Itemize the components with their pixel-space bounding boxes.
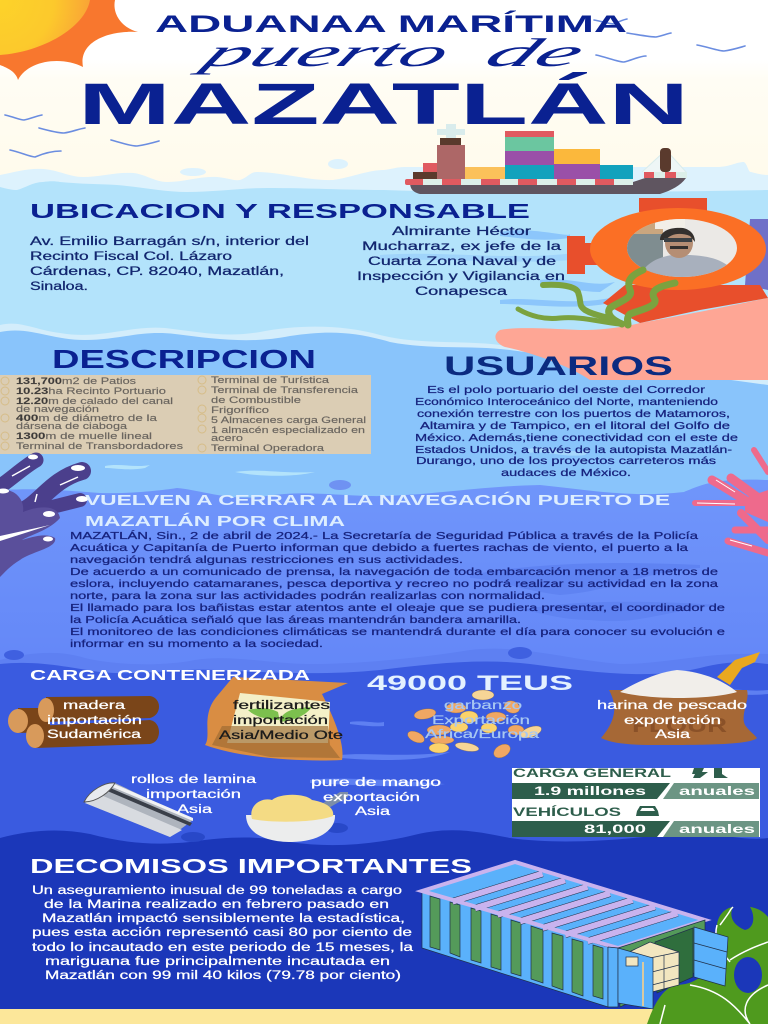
text: news body: norte, para la zona sur las actividades podrán realizarlas con normalidad. [70,590,545,602]
icon: chickpeas with garbanzo label: Africa/Europa [425,729,540,741]
text: responsable: Almirante Héctor [392,226,531,238]
panel: descripcion list: 5 Almacenes carga General [211,415,366,425]
panel: descripcion list: de navegación [16,404,99,414]
title: MAZATLÁN [78,72,689,137]
text: decomisos body: Un aseguramiento inusual de 99 toneladas a cargo [32,885,402,897]
text: news body: navegación tendrá algunas restricciones en sus actividades. [70,554,463,566]
panel: descripcion list: Terminal de Transbordadores [16,441,184,451]
icon: steel coil with label: Asia [177,804,213,816]
icon: steel coil with label [84,774,257,837]
icon: pink coral [695,450,768,553]
text: decomisos body: pues esta acción representó casi 80 por ciento de [32,927,412,939]
carga general row: CARGA GENERAL [513,768,671,780]
text: decomisos body: mariguana fue principalmente incautada en [45,956,390,968]
panel: descripcion list: Terminal de Turística [211,375,329,385]
icon: fertilizer bag with label: importación [233,715,328,727]
panel: descripcion list: 400 m de diámetro de la [16,413,157,423]
text: usuarios: México. Además,tiene conectividad con el este de [415,432,738,444]
text: responsable: Mucharraz, ex jefe de la [362,241,562,253]
icon: flour sack with harina label: exportación [624,715,721,727]
title [78,10,689,137]
icon: sun [0,0,138,80]
icon: purple coral [0,454,88,577]
panel: descripcion list: 131,700 m2 de Patios [16,376,137,386]
text: news body: Acuática y Capitanía de Puerto informan que debido a fuertes rachas de viento, el puerto a la [70,542,688,554]
panel: descripcion list: Terminal de Transferencia [211,385,358,395]
text: usuarios: Es el polo portuario del oeste del Corredor [427,384,706,396]
panel: descripcion list: 1300 m de muelle lineal [16,431,152,441]
text: address: Recinto Fiscal Col. Lázaro [30,251,232,263]
icon: green leaves [647,907,768,1024]
panel: descripcion list: Frigorífico [211,405,269,415]
heading: news: MAZATLÁN POR CLIMA [85,513,346,530]
panel: descripcion list: Terminal Operadora [211,443,324,453]
text: responsable [357,226,565,298]
icon: logs with madera label: madera [63,700,126,712]
carga general row: anuales [679,784,756,798]
title: ADUANAA MARÍTIMA [155,10,627,38]
text: usuarios: Económico Interoceánico del Norte, manteniendo [415,396,718,408]
title: puerto [188,32,460,75]
icon: chickpeas with garbanzo label: Exportación [432,715,530,727]
text: responsable: Cuarta Zona Naval y de [368,256,556,268]
carga general row: 1.9 millones [534,784,647,798]
panel: descripcion list: acero [211,433,243,443]
text: responsable: Conapesca [415,286,508,298]
vehiculos row: VEHÍCULOS [513,806,622,819]
heading: decomisos importantes: DECOMISOS IMPORTANTES [30,856,472,878]
text: usuarios: Estados Unidos, a través de la autopista Mazatlán- [415,444,733,456]
icon: logs with madera label: importación [47,715,142,727]
text: usuarios: Durango, uno de los proyectos carreteros más [416,455,716,467]
text: responsable: Inspección y Vigilancia en [357,271,565,283]
text: decomisos body: Mazatlán con 99 mil 40 kilos (79.78 por ciento) [45,970,401,982]
icon: bowl of mango puree with label: pure de mango [311,777,441,789]
icon: seagulls [5,19,745,157]
icon: steel coil with label: importación [146,789,241,801]
text: news body [70,529,725,650]
text: address [30,236,309,293]
text: usuarios: conexión terrestre con los puertos de Matamoros, [417,408,730,420]
text: decomisos body [32,885,414,982]
heading: news [85,491,671,530]
vehiculos row [512,806,759,837]
text: news body: De acuerdo a un comunicado de prensa, la navegación de toda embarcación menor a 18 metros de [70,566,718,578]
icon: logs with madera label [8,696,159,748]
icon: porthole with portrait and seaweed [518,198,768,325]
icon: fertilizer bag with label: fertilizantes [233,700,330,712]
vehiculos row: 81,000 [584,822,647,836]
vehiculos row: anuales [679,822,756,836]
text: news body: MAZATLÁN, Sin., 2 de abril de 2024.- La Secretaría de Seguridad Pública a través de la Policía [70,529,698,542]
panel: descripcion list [0,375,371,454]
heading: carga contenerizada: CARGA CONTENERIZADA [30,667,310,684]
icon: shipping container [422,862,728,1009]
text: usuarios: audaces de México. [501,467,631,479]
icon: container ship [405,124,687,194]
icon: flour sack with harina label: Asia [655,729,691,741]
icon: logs with madera label: Sudamérica [47,729,142,741]
carga general row [512,768,759,799]
title: de [477,32,594,75]
text: decomisos body: Mazatlán impactó sensiblemente la estadística, [42,913,405,925]
panel: descripcion list: dársena de ciaboga [16,421,127,431]
text: address: Av. Emilio Barragán s/n, interior del [30,236,309,248]
icon: flour sack with harina label: FLOUR [632,715,728,737]
icon: peach hand shape [495,298,768,380]
text: address: Sinaloa. [30,281,88,293]
heading: descripcion: DESCRIPCION [52,344,316,374]
heading: 49000 teus: 49000 TEUS [367,672,573,695]
heading: usuarios: USUARIOS [444,351,673,381]
icon: bowl of mango puree with label [246,777,441,842]
text: usuarios: Altamira y de Tampico, en el litoral del Golfo de [420,420,730,432]
panel: descripcion list: 12.20 m de calado del canal [16,396,173,406]
text: decomisos body: todo lo incautado en este periodo de 15 meses, la [32,942,414,954]
text: address: Cárdenas, CP. 82040, Mazatlán, [30,266,284,278]
icon: chickpeas with garbanzo label [406,690,543,761]
icon: bowl of mango puree with label: exportación [323,792,420,804]
text: news body: la Policía Acuática señaló que las áreas mantendrán bandera amarilla. [70,614,521,626]
panel: descripcion list: 10.23 ha Recinto Portuario [16,386,166,396]
table: carga general y vehiculos [512,768,760,837]
icon: steel coil with label: rollos de lamina [131,774,257,786]
text: news body: eslora, incluyendo catamaranes, pesca deportiva y recreo no podrá realizar su actividad en la zona [70,578,718,590]
text: decomisos body: de la Marina realizado en febrero pasado en [44,899,389,911]
panel: descripcion list: 1 almacén especializado en [211,425,365,435]
icon: fertilizer bag with label [205,677,348,760]
icon: flour sack with harina label: harina de pescado [597,700,747,712]
panel: descripcion list: de Combustible [211,395,301,405]
text: usuarios [415,384,738,479]
icon: bowl of mango puree with label: Asia [355,806,391,818]
text: news body: informar en su momento a la sociedad. [70,638,323,650]
heading: news: VUELVEN A CERRAR A LA NAVEGACIÓN PUERTO DE [85,491,671,509]
heading: ubicacion y responsable: UBICACION Y RESPONSABLE [30,201,530,223]
text: news body: El llamado para los bañistas estar atentos ante el oleaje que se pudiera presentar, el coordinador de [70,602,725,614]
icon: fertilizer bag with label: Asia/Medio Ote [219,730,343,742]
icon: chickpeas with garbanzo label: garbanzo [444,700,522,712]
icon: flour sack with harina label [597,652,760,745]
text: news body: El monitoreo de las condiciones climáticas se mantendrá durante el día para conocer su evolución e [70,626,725,638]
